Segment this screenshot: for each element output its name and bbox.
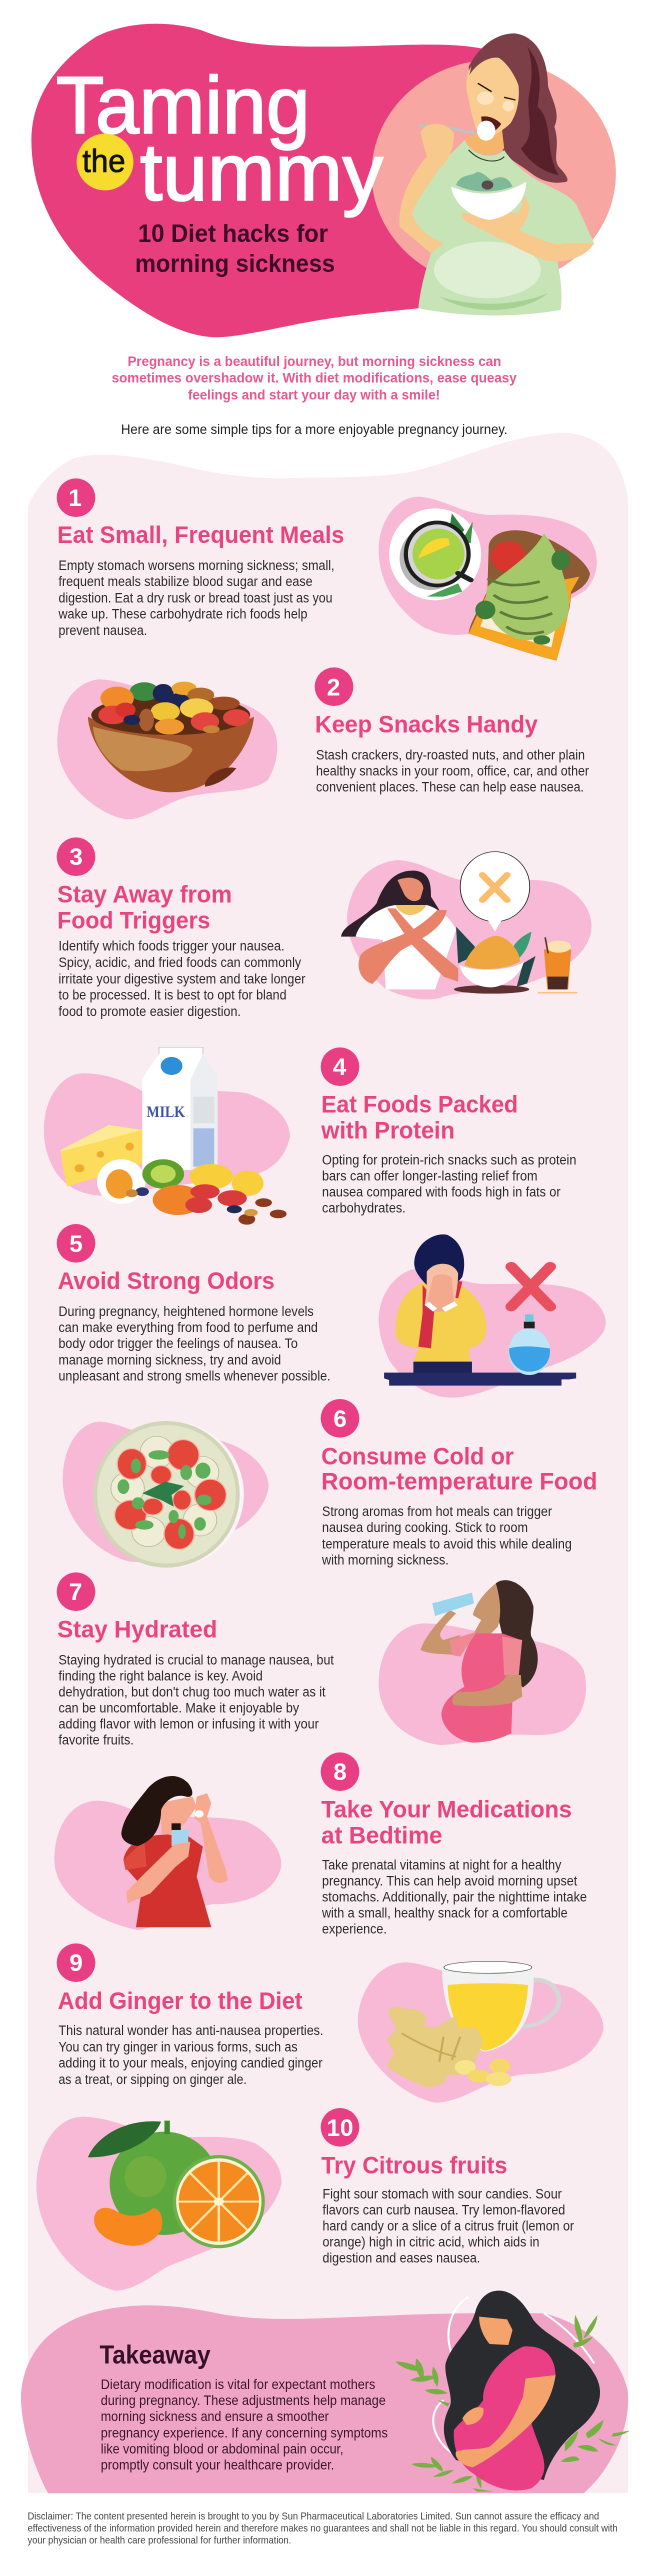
heading: tip 1: Eat Small, Frequent Meals bbox=[57, 522, 344, 549]
body: tip 10: digestion and eases nausea. bbox=[322, 2251, 480, 2266]
panel: tip 9 bbox=[57, 1943, 603, 2103]
title bbox=[56, 61, 384, 218]
title: Taming bbox=[56, 61, 310, 151]
heading: tip 9: Add Ginger to the Diet bbox=[58, 1988, 303, 2015]
body: tip 9: adding it to your meals, enjoying candied ginger bbox=[58, 2056, 323, 2071]
illustration: pregnant woman eating bbox=[399, 33, 594, 315]
takeaway body bbox=[101, 2377, 388, 2472]
number badge 5 bbox=[57, 1224, 95, 1263]
number badge 6 bbox=[321, 1399, 359, 1438]
body: tip 10: hard candy or a slice of a citrus fruit (lemon or bbox=[322, 2219, 574, 2234]
disclaimer: Disclaimer: The content presented herein is brought to you by Sun Pharmaceutical Laboratories Limited. Sun cannot assure the efficacy and bbox=[28, 2511, 599, 2522]
body: tip 4: bars can offer longer-lasting relief from bbox=[322, 1169, 538, 1184]
heading: tip 8: Take Your Medications bbox=[321, 1797, 572, 1824]
body: tip 3: to be processed. It is best to opt for bland bbox=[58, 988, 286, 1003]
body: tip 10: orange) high in citric acid, which aids in bbox=[322, 2235, 540, 2250]
subtitle bbox=[135, 220, 335, 278]
panel: tip 8 bbox=[54, 1752, 587, 1937]
number badge 9: 9 bbox=[69, 1950, 83, 1977]
body: tip 6: nausea during cooking. Stick to room bbox=[322, 1520, 528, 1535]
heading: tip 3: Food Triggers bbox=[57, 907, 210, 934]
lead-in sentence: Here are some simple tips for a more enjoyable pregnancy journey. bbox=[121, 422, 508, 438]
heading: tip 6 bbox=[321, 1443, 597, 1495]
body: tip 2 bbox=[316, 747, 589, 794]
heading: tip 3: Stay Away from bbox=[57, 881, 232, 908]
heading: tip 4 bbox=[320, 1092, 518, 1144]
subtitle: morning sickness bbox=[135, 250, 335, 278]
body: tip 7: can be uncomfortable. Make it enjoyable by bbox=[58, 1701, 299, 1716]
body: tip 7: adding flavor with lemon or infusing it with your bbox=[58, 1717, 319, 1732]
takeaway body: promptly consult your healthcare provider. bbox=[101, 2457, 334, 2472]
body: tip 10: Fight sour stomach with sour candies. Sour bbox=[322, 2186, 562, 2201]
body: tip 3: food to promote easier digestion. bbox=[58, 1004, 241, 1019]
number badge 4: 4 bbox=[333, 1054, 347, 1081]
heading: tip 5: Avoid Strong Odors bbox=[58, 1268, 275, 1295]
body: tip 7: dehydration, but don't chug too much water as it bbox=[58, 1685, 326, 1700]
body: tip 5: During pregnancy, heightened hormone levels bbox=[58, 1304, 314, 1319]
number badge 10: 10 bbox=[327, 2115, 353, 2142]
takeaway body: like vomiting blood or abdominal pain occur, bbox=[101, 2441, 344, 2456]
number badge 3 bbox=[57, 837, 95, 876]
illustration: pregnant woman drinking water bbox=[379, 1580, 586, 1745]
number badge 6: 6 bbox=[333, 1406, 347, 1433]
illustration: ginger tea and ginger root bbox=[358, 1961, 603, 2103]
illustration: caprese salad plate bbox=[63, 1421, 269, 1568]
body: tip 7 bbox=[58, 1652, 334, 1748]
takeaway heading: Takeaway bbox=[100, 2339, 211, 2369]
number badge 10 bbox=[321, 2108, 359, 2147]
number badge 7: 7 bbox=[69, 1579, 82, 1606]
body: tip 7: Staying hydrated is crucial to manage nausea, but bbox=[58, 1652, 334, 1667]
hero pink blob bbox=[31, 24, 586, 337]
body: tip 5: can make everything from food to perfume and bbox=[58, 1320, 318, 1335]
illustration: milk carton with cheese, egg and fruit bbox=[44, 1047, 290, 1225]
body: tip 5 bbox=[58, 1304, 330, 1383]
heading: tip 6: Consume Cold or bbox=[321, 1443, 514, 1470]
heading: tip 8: at Bedtime bbox=[321, 1822, 442, 1849]
body: tip 5: unpleasant and strong smells whenever possible. bbox=[58, 1368, 330, 1383]
intro text: Pregnancy is a beautiful journey, but morning sickness can bbox=[128, 354, 501, 370]
body: tip 9 bbox=[58, 2023, 323, 2087]
body: tip 7: favorite fruits. bbox=[58, 1733, 134, 1748]
body: tip 9: You can try ginger in various forms, such as bbox=[58, 2039, 298, 2054]
body: tip 6 bbox=[321, 1504, 572, 1567]
milk label: MILK bbox=[146, 1104, 185, 1121]
body: tip 5: body odor trigger the feelings of nausea. To bbox=[58, 1336, 298, 1351]
illustration: green citrus and orange slices bbox=[36, 2117, 282, 2291]
heading: tip 6: Room-temperature Food bbox=[321, 1468, 597, 1495]
body: tip 1: wake up. These carbohydrate rich foods help bbox=[58, 606, 308, 621]
body: tip 3 bbox=[58, 939, 306, 1019]
body: tip 1: digestion. Eat a dry rusk or bread toast just as you bbox=[58, 590, 332, 605]
panel: tip 7 bbox=[57, 1572, 586, 1748]
heading: tip 7: Stay Hydrated bbox=[57, 1617, 217, 1644]
heading: tip 4: with Protein bbox=[320, 1117, 455, 1144]
heading: tip 4: Eat Foods Packed bbox=[321, 1092, 518, 1119]
number badge 1 bbox=[57, 478, 95, 517]
body: tip 2: convenient places. These can help ease nausea. bbox=[316, 779, 584, 794]
number badge 8: 8 bbox=[333, 1759, 347, 1786]
illustration: bowl of dried fruits and nuts bbox=[57, 679, 277, 819]
panel: tip 4 bbox=[44, 1047, 576, 1225]
body: tip 8: stomachs. Additionally, pair the nighttime intake bbox=[322, 1889, 587, 1904]
panel: tip 5 bbox=[57, 1224, 606, 1398]
takeaway body: pregnancy experience. If any concerning symptoms bbox=[101, 2425, 388, 2440]
body: tip 7: finding the right balance is key. Avoid bbox=[58, 1668, 263, 1683]
number badge 9 bbox=[57, 1943, 95, 1982]
body: tip 3: Identify which foods trigger your nausea. bbox=[58, 939, 284, 954]
panel: hero header bbox=[31, 24, 616, 337]
panel: tip 10 bbox=[36, 2108, 574, 2291]
body: tip 1: prevent nausea. bbox=[58, 623, 147, 638]
panel: takeaway bbox=[21, 2291, 630, 2493]
takeaway body: morning sickness and ensure a smoother bbox=[101, 2409, 329, 2424]
body: tip 9: This natural wonder has anti-nausea properties. bbox=[58, 2023, 323, 2038]
body: tip 2: Stash crackers, dry-roasted nuts, and other plain bbox=[316, 747, 585, 762]
number badge 5: 5 bbox=[69, 1231, 83, 1258]
panel: tip 2 bbox=[57, 667, 589, 819]
salmon circle behind woman bbox=[372, 60, 616, 287]
number badge 2 bbox=[315, 667, 353, 706]
number badge 2: 2 bbox=[327, 674, 340, 702]
disclaimer bbox=[28, 2511, 618, 2547]
illustration: pregnant woman with leaves bbox=[395, 2291, 630, 2492]
illustration: woman covering nose near perfume bbox=[379, 1234, 606, 1398]
body: tip 1: frequent meals stabilize blood sugar and ease bbox=[58, 574, 312, 589]
heading: tip 3 bbox=[57, 881, 232, 934]
body: tip 8: pregnancy. This can help avoid morning upset bbox=[322, 1873, 577, 1888]
number badge 8 bbox=[321, 1752, 359, 1791]
body: tip 10 bbox=[322, 2186, 574, 2266]
body: tip 4: Opting for protein-rich snacks such as protein bbox=[322, 1152, 576, 1167]
body: tip 1 bbox=[58, 558, 335, 638]
panel: tip 6 bbox=[63, 1399, 597, 1568]
body: tip 6: temperature meals to avoid this while dealing bbox=[322, 1536, 572, 1551]
body: tip 4: carbohydrates. bbox=[322, 1201, 406, 1216]
subtitle: 10 Diet hacks for bbox=[138, 220, 328, 248]
panel: tip 1 bbox=[57, 478, 597, 661]
intro text: sometimes overshadow it. With diet modifications, ease queasy bbox=[112, 370, 517, 386]
intro text: feelings and start your day with a smile! bbox=[188, 387, 440, 403]
body: tip 1: Empty stomach worsens morning sickness; small, bbox=[58, 558, 334, 573]
body: tip 2: healthy snacks in your room, office, car, and other bbox=[316, 763, 589, 778]
number badge 3: 3 bbox=[69, 844, 83, 871]
takeaway body: during pregnancy. These adjustments help manage bbox=[101, 2393, 386, 2408]
body: tip 3: Spicy, acidic, and fried foods can commonly bbox=[58, 955, 301, 970]
body: tip 8: experience. bbox=[322, 1922, 387, 1937]
heading: tip 8 bbox=[321, 1797, 572, 1849]
body: tip 3: irritate your digestive system and take longer bbox=[58, 972, 306, 987]
illustration: green tea and avocado toast bbox=[379, 497, 597, 661]
illustration: woman refusing food bbox=[341, 852, 591, 999]
body: tip 10: flavors can curb nausea. Try lemon-flavored bbox=[322, 2202, 565, 2217]
body: tip 8 bbox=[321, 1857, 587, 1937]
heading: tip 2: Keep Snacks Handy bbox=[315, 712, 538, 739]
number badge 1: 1 bbox=[68, 485, 82, 512]
illustration: woman taking a pill with water bbox=[54, 1776, 281, 1930]
intro text bbox=[112, 354, 517, 403]
body: tip 9: as a treat, or sipping on ginger ale. bbox=[58, 2072, 247, 2087]
panel: tip 3 bbox=[57, 837, 591, 1019]
heading: tip 10: Try Citrous fruits bbox=[321, 2152, 507, 2179]
body: tip 5: manage morning sickness, try and avoid bbox=[58, 1352, 281, 1367]
body: tip 6: Strong aromas from hot meals can trigger bbox=[322, 1504, 552, 1519]
number badge 4 bbox=[321, 1047, 359, 1086]
title: tummy bbox=[140, 128, 384, 218]
number badge 7 bbox=[57, 1572, 95, 1611]
body: tip 8: with a small, healthy snack for a comfortable bbox=[321, 1905, 568, 1920]
title: the bbox=[82, 143, 125, 179]
takeaway body: Dietary modification is vital for expectant mothers bbox=[101, 2377, 376, 2392]
body: tip 6: with morning sickness. bbox=[321, 1552, 449, 1567]
takeaway pink blob bbox=[21, 2305, 628, 2493]
body: tip 8: Take prenatal vitamins at night for a healthy bbox=[322, 1857, 562, 1872]
disclaimer: your physician or health care professional for further information. bbox=[28, 2536, 291, 2547]
body: tip 4: nausea compared with foods high in fats or bbox=[322, 1185, 561, 1200]
panel: light pink tips background bbox=[28, 433, 628, 2493]
body: tip 4 bbox=[322, 1152, 576, 1216]
